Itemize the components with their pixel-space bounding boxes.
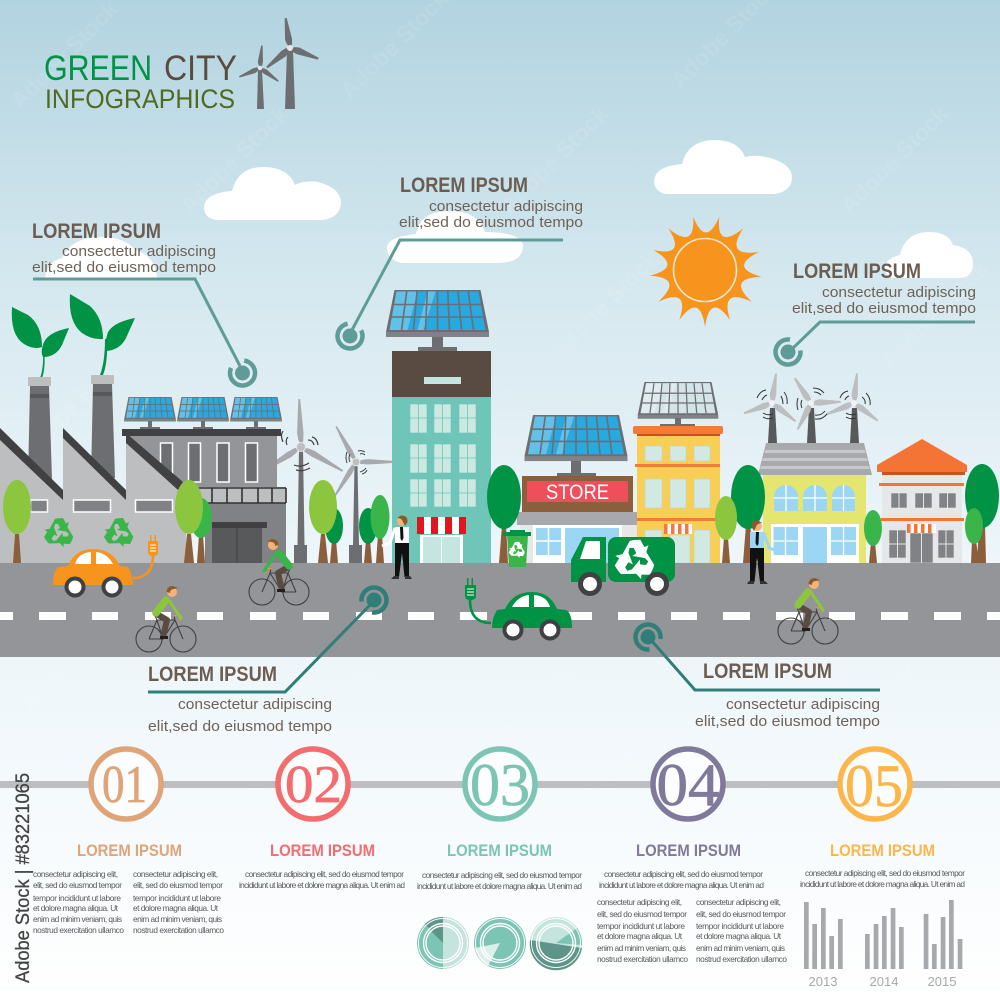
step 05: 05 [845,753,903,819]
pie chart 3 [530,917,582,970]
icon: sun [650,217,762,327]
step 03: LOREM IPSUM [447,841,552,860]
callout: bottom right: LOREM IPSUM [703,660,832,683]
icon: title wind turbines [238,18,320,109]
step 04: enim ad minim veniam, quis [696,943,785,953]
watermark: Adobe Stock [875,586,993,704]
step 01: nostrud exercitation ullamco [133,925,224,935]
callout: top right: consectetur adipiscing [822,285,976,301]
watermark: Adobe Stock [175,101,293,219]
building: white house with orange roof [877,439,967,563]
step 02: LOREM IPSUM [270,841,375,860]
building: store [517,476,637,563]
step 04: tempor incididunt ut labore [597,921,685,931]
step 04: consectetur adipiscing elit, [696,897,781,907]
step 04: et dolore magna aliqua. Ut [696,931,782,941]
callout: top centre: consectetur adipiscing [429,199,583,215]
cloud 4 [885,232,973,278]
watermark: Adobe Stock [835,101,953,219]
step 04: nostrud exercitation ullamco [597,954,688,964]
icon: plant leaves on chimneys [12,294,135,378]
step 04 [597,749,787,964]
step 01: et dolore magna aliqua. Ut [133,903,219,913]
step 01 [33,749,224,935]
callout: top centre [333,174,583,353]
road [0,563,1000,657]
watermark: Adobe Stock [195,746,313,864]
callout: bottom left [148,586,388,735]
callout: top left: LOREM IPSUM [32,220,161,243]
step 01: consectetur adipiscing elit, [33,869,118,879]
title: GREEN [44,49,152,88]
callout: top centre: LOREM IPSUM [400,174,528,197]
step 03: incididunt ut labore et dolore magna aliqua. Ut enim ad [417,881,582,891]
cyclist 3 [778,578,838,644]
bar charts 2013-2015: 2013 [809,974,837,989]
rooftop wind turbines [743,373,880,443]
watermark: Adobe Stock [15,346,133,464]
watermark: Adobe Stock [15,596,133,714]
step 01: LOREM IPSUM [77,841,182,860]
person 2 [747,520,777,584]
callout: bottom left: consectetur adipiscing [178,697,332,713]
recycle bin [503,530,531,567]
stock id vertical text: Adobe Stock | #83221065 [13,773,34,983]
step 01: consectetur adipiscing elit, [133,869,218,879]
sky background [0,0,1000,563]
callout: top left [32,220,257,387]
building: grey solar office [122,429,286,563]
wind turbine 1 by road [259,399,344,563]
step 04: et dolore magna aliqua. Ut [597,931,683,941]
callout: bottom left: elit,sed do eiusmod tempo [148,719,332,735]
step 01: enim ad minim veniam, quis [33,914,122,924]
factory chimneys [28,375,115,480]
step 03: consectetur adipiscing elit, sed do eiusmod tempor [422,870,582,880]
step 03: 03 [470,752,530,818]
solar panel on store [524,415,628,476]
watermark: Adobe Stock [545,576,663,694]
timeline bar [0,781,1000,788]
callout: top left: consectetur adipiscing [62,244,216,260]
step 01: enim ad minim veniam, quis [133,914,222,924]
watermark: Adobe Stock [545,246,663,364]
step 04: consectetur adipiscing elit, sed do eiusmod tempor [604,869,763,879]
orange electric car [53,535,158,598]
step 05: incididunt ut labore et dolore magna aliqua. Ut enim ad [800,879,965,889]
step 03 [417,749,582,891]
callout: bottom right: consectetur adipiscing [726,697,880,713]
cloud 3 [654,140,792,194]
cloud 1 [204,167,341,220]
bar charts 2013-2015: 2014 [870,974,898,989]
step 04: incididunt ut labore et dolore magna aliqua. Ut enim ad [599,880,764,890]
solar panel on tower [386,290,489,351]
recycling truck [571,537,675,596]
step 05: LOREM IPSUM [830,841,935,860]
step 01: et dolore magna aliqua. Ut [33,903,119,913]
callout: top right: LOREM IPSUM [793,260,921,283]
title: CITY [164,49,237,88]
step 01: tempor incididunt ut labore [33,893,121,903]
step 04: elit, sed do eiusmod tempor [696,909,786,919]
green electric car [465,578,572,640]
step 02 [239,749,405,890]
store sign: STORE [546,481,609,504]
cloud 5 [45,237,157,278]
callout: top left: elit,sed do eiusmod tempo [32,260,216,276]
step 01: 01 [102,756,147,814]
step 02: 02 [285,756,342,814]
step 01: elit, sed do eiusmod tempor [133,880,223,890]
building: lime house with grey roof [758,443,872,563]
step 04: enim ad minim veniam, quis [597,943,686,953]
step 04: elit, sed do eiusmod tempor [597,909,687,919]
wind turbine 2 by road [332,425,397,563]
lower page background [0,657,1000,1000]
person 1 [382,516,412,579]
step 01: nostrud exercitation ullamco [33,925,124,935]
cyclist 2 [249,539,309,605]
callout: top centre: elit,sed do eiusmod tempo [399,215,583,231]
watermark: Adobe Stock [855,766,973,884]
building: yellow apartments [633,426,723,563]
step 02: consectetur adipiscing elit, sed do eiusmod tempor [245,869,404,879]
step 01: elit, sed do eiusmod tempor [33,880,122,890]
bar charts 2013-2015 [804,900,962,989]
step 02: incididunt ut labore et dolore magna aliqua. Ut enim ad [239,880,405,890]
callout: top right [774,260,976,366]
step 05 [800,749,965,889]
pie chart 2 [474,917,526,969]
watermark: Adobe Stock [875,256,993,374]
title [44,49,237,114]
step 05: consectetur adipiscing elit, sed do eiusmod tempor [805,868,965,878]
step 04: consectetur adipiscing elit, [597,897,682,907]
title: INFOGRAPHICS [45,84,235,114]
callout: top right: elit,sed do eiusmod tempo [792,301,976,317]
step 04: tempor incididunt ut labore [696,921,784,931]
roof solar panels [124,397,282,429]
watermark: Adobe Stock [495,101,613,219]
pie chart 1 [417,917,469,969]
cyclist 1 [136,586,196,652]
cloud 2 [387,211,523,263]
bar charts 2013-2015: 2015 [928,974,956,989]
solar panel on yellow building [638,382,718,426]
step 01: tempor incididunt ut labore [133,893,221,903]
step 04: 04 [656,752,720,818]
step 04: nostrud exercitation ullamco [696,954,787,964]
watermark: Adobe Stock [345,576,463,694]
callout: bottom right [634,623,880,730]
step 04: LOREM IPSUM [636,841,741,860]
factory sheds [0,428,186,563]
watermark: Adobe Stock [525,746,643,864]
icon: recycle symbols on factory [41,518,137,549]
trees [3,464,999,563]
building: tall teal tower [392,351,491,563]
callout: bottom right: elit,sed do eiusmod tempo [695,714,880,730]
callout: bottom left: LOREM IPSUM [148,663,277,686]
